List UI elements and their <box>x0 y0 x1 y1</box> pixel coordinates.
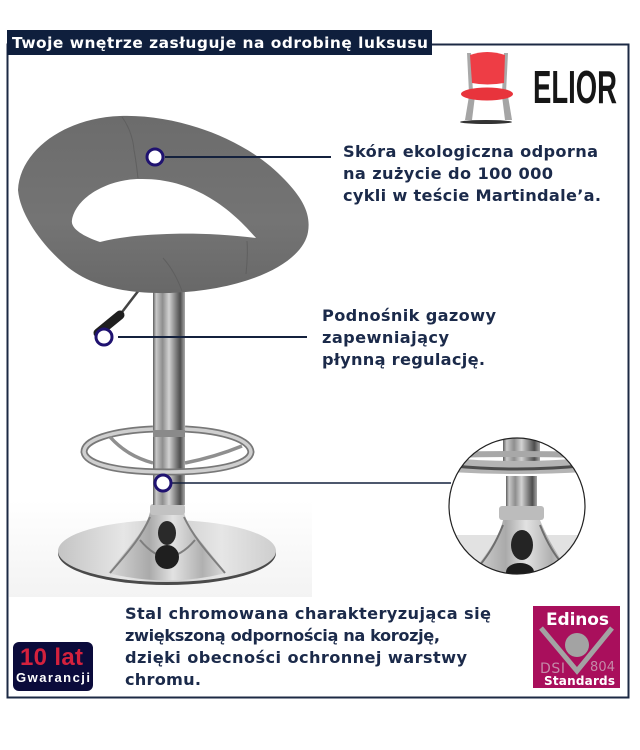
badge: Edinos standard: 804 <box>590 660 615 675</box>
footrest ring <box>84 429 251 472</box>
callout text: gas lift: zapewniający <box>322 328 449 347</box>
badge: Edinos standard: DSI <box>540 661 565 677</box>
photo: bar stool <box>9 116 312 597</box>
callout text: gas lift: płynną regulację. <box>322 350 485 369</box>
callout marker: chrome <box>155 475 451 491</box>
badge: 10 year warranty: Gwarancji <box>16 670 90 685</box>
callout text: leather: cykli w teście Martindale’a. <box>343 186 601 205</box>
callout text: chrome: zwiększoną odpornością na korozję, <box>125 626 440 645</box>
seat stitching <box>122 117 247 291</box>
callout marker: gas lift <box>96 329 307 345</box>
badge: Edinos standard: Edinos <box>546 610 609 630</box>
callout text: gas lift: Podnośnik gazowy <box>322 306 496 325</box>
floor shading <box>9 500 312 597</box>
badge: Edinos standard <box>533 606 620 688</box>
chair pole <box>153 290 185 505</box>
magnifier circle: chrome detail <box>449 438 585 581</box>
chair seat <box>18 116 309 293</box>
logo: Elior <box>460 52 617 124</box>
callout text: leather <box>343 142 601 205</box>
callout text: leather: Skóra ekologiczna odporna <box>343 142 598 161</box>
callout text: gas lift <box>322 306 496 369</box>
callout text: chrome: Stal chromowana charakteryzująca się <box>125 604 491 623</box>
callout text: chrome: dzięki obecności ochronnej warstwy <box>125 648 467 667</box>
callout text: leather: na zużycie do 100 000 <box>343 164 553 183</box>
gas lever <box>98 290 139 333</box>
badge: Edinos standard: Standards <box>544 674 615 688</box>
heading bar: Twoje wnętrze zasługuje na odrobinę luksusu <box>12 34 428 52</box>
callout marker: leather <box>147 149 331 165</box>
callout text: chrome: chromu. <box>125 670 201 689</box>
chair base <box>58 504 276 585</box>
badge: 10 year warranty: 10 lat <box>20 644 83 671</box>
badge: 10 year warranty <box>13 642 93 691</box>
callout text: chrome <box>125 604 491 689</box>
